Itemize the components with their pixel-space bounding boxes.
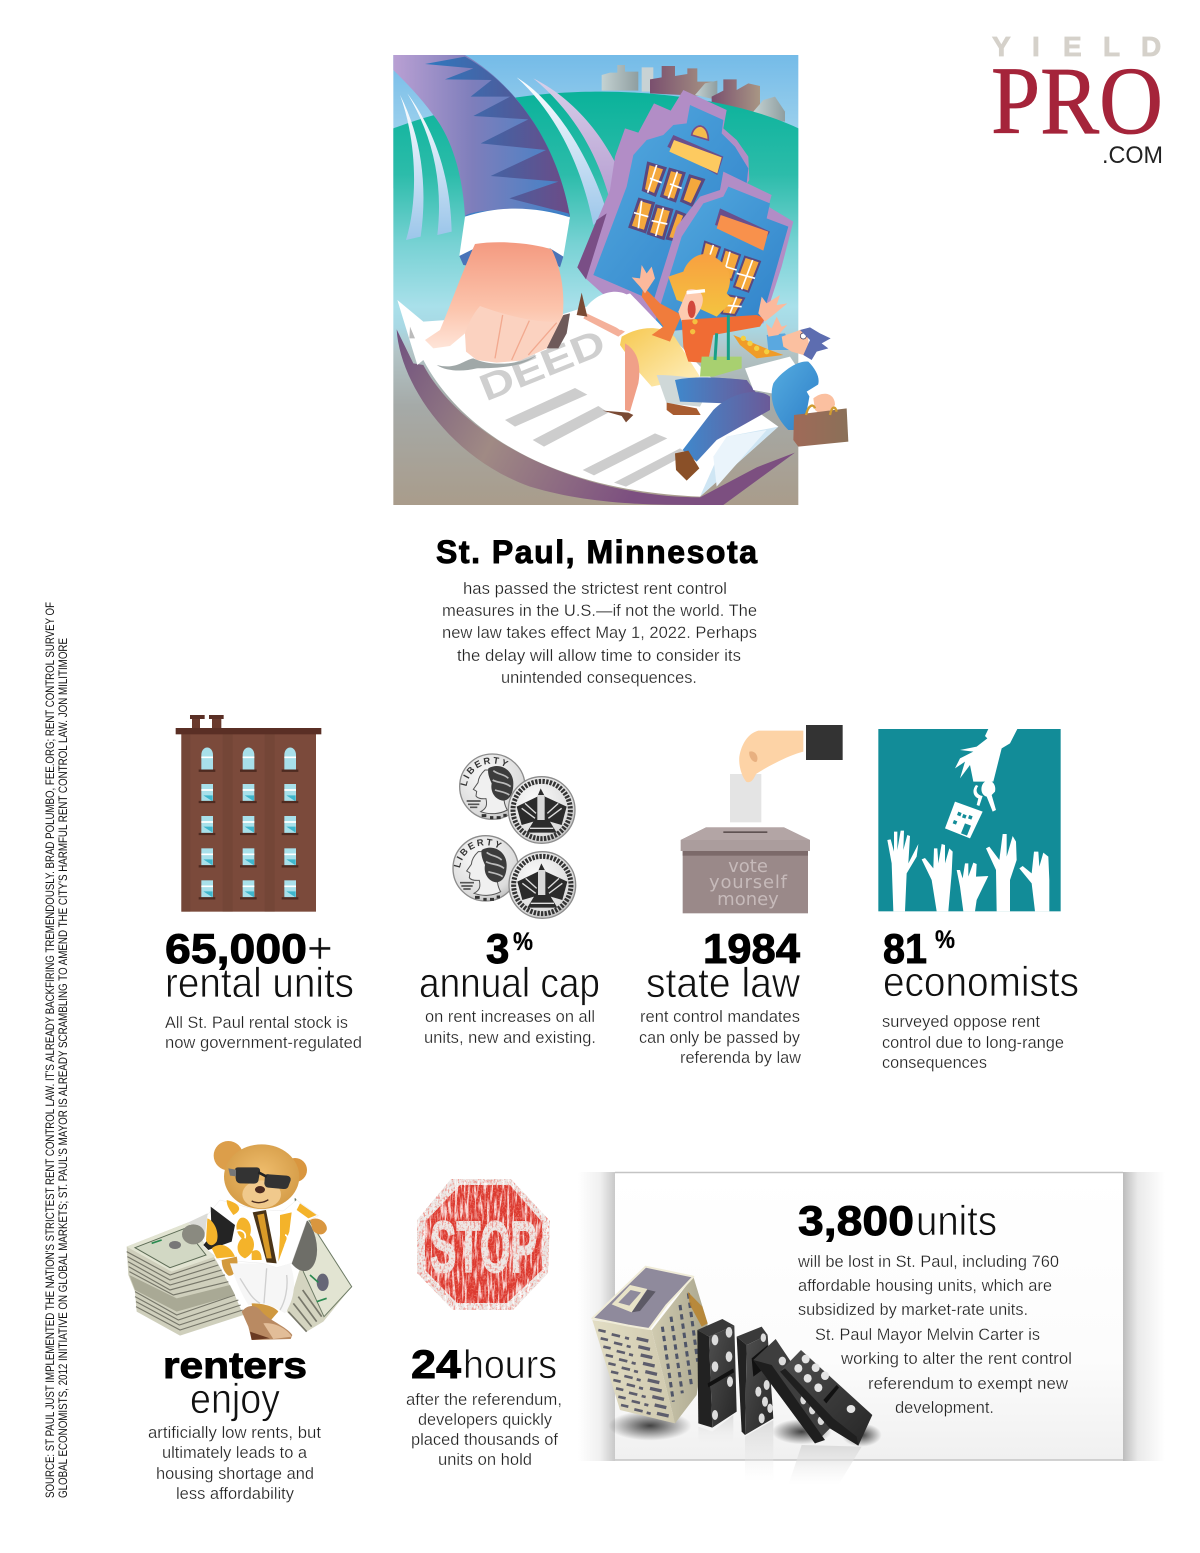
description: units on hold — [438, 1450, 532, 1469]
logo word: yield: L — [1103, 31, 1120, 62]
shirt — [203, 1200, 318, 1268]
icon: ballot box with hand — [681, 725, 843, 913]
stat: renters enjoy — [127, 1141, 352, 1503]
quarter heads 2 — [452, 835, 518, 902]
intro paragraph: the delay will allow time to consider its — [457, 646, 741, 665]
man falling with briefcase — [657, 317, 848, 481]
intro paragraph: unintended consequences. — [501, 668, 697, 687]
description: surveyed oppose rent — [882, 1012, 1040, 1031]
source note: GLOBAL ECONOMISTS, 2012 INITIATIVE ON GLOBAL MARKETS; ST. PAUL'S MAYOR IS ALREADY SCRAMBLING TO AMEND THE CITY'S HARMFUL RENT CONTROL LAW. JON MILITIMORE — [58, 638, 70, 1498]
logo: Yield Pro — [991, 31, 1163, 169]
description — [639, 1007, 802, 1067]
shadows and reflections — [608, 1411, 882, 1485]
description: will be lost in St. Paul, including 760 — [797, 1252, 1059, 1271]
description: ultimately leads to a — [162, 1443, 308, 1462]
domino 2 — [737, 1327, 773, 1435]
logo word: yield: E — [1063, 31, 1082, 62]
description: units, new and existing. — [424, 1028, 596, 1047]
description: now government-regulated — [165, 1033, 362, 1052]
description: rent control mandates — [640, 1007, 800, 1026]
description: referenda by law — [680, 1048, 802, 1067]
deed wording and lines — [473, 321, 688, 487]
label: annual cap: annual cap — [419, 959, 600, 1006]
distant skyline — [602, 65, 785, 122]
icon: quarters — [452, 753, 576, 919]
description — [165, 1013, 362, 1052]
description: artificially low rents, but — [148, 1423, 321, 1442]
description — [148, 1423, 321, 1503]
panel: 3,800 units lost — [578, 1172, 1165, 1485]
stat: 24 hours — [406, 1178, 562, 1469]
quarter heads 2: LIBERTY — [454, 838, 502, 868]
icon: teddy bear on stack of money — [127, 1141, 352, 1340]
heading: renters: renters — [163, 1345, 307, 1386]
description: subsidized by market-rate units. — [798, 1300, 1028, 1319]
title: St. Paul, Minnesota — [436, 534, 757, 570]
description: working to alter the rent control — [840, 1349, 1072, 1368]
quarter heads 1 — [459, 753, 525, 820]
front building — [643, 172, 793, 333]
percent sign: % — [513, 928, 533, 956]
description — [406, 1390, 562, 1469]
description: after the referendum, — [406, 1390, 562, 1409]
figure: 3,800 units: units — [916, 1197, 997, 1244]
domino 4 — [780, 1350, 872, 1446]
money stack — [127, 1198, 352, 1336]
quarter tails 1 — [508, 777, 575, 843]
woman falling — [577, 254, 787, 422]
logo word: .com: .COM — [1102, 142, 1163, 169]
description: referendum to exempt new — [868, 1374, 1069, 1393]
panel background — [578, 1172, 1165, 1461]
suit sleeve — [393, 55, 570, 222]
description — [424, 1007, 596, 1047]
ballot box text — [709, 856, 788, 910]
label: enjoy: enjoy — [190, 1375, 280, 1422]
ballot box text: vote — [728, 856, 768, 877]
stat: 81% economists — [878, 729, 1079, 1072]
illustration: hand crushing deed with buildings and people — [393, 55, 848, 505]
icon: distressed stop sign: STOP — [430, 1208, 537, 1288]
deed paper — [397, 293, 778, 497]
motion lines — [400, 77, 632, 240]
label: economists: economists — [883, 958, 1079, 1005]
stat: 3% annual cap — [419, 753, 600, 1047]
domino 1 — [697, 1319, 737, 1428]
description: development. — [895, 1398, 994, 1417]
icon: distressed stop sign — [417, 1178, 551, 1312]
description: affordable housing units, which are — [798, 1276, 1052, 1295]
figure: 3: 3 — [486, 925, 509, 972]
description: can only be passed by — [639, 1028, 800, 1047]
label: rental units: rental units — [165, 959, 354, 1006]
green hill and lower background — [393, 92, 798, 505]
description — [797, 1252, 1072, 1417]
figure: 3,800 units — [798, 1197, 997, 1244]
quarter heads 1: LIBERTY — [460, 756, 508, 786]
giant hand and cuff — [425, 209, 570, 371]
source note: SOURCE: ST PAUL JUST IMPLEMENTED THE NATION'S STRICTEST RENT CONTROL LAW. IT'S ALREADY BACKFIRING TREMENDOUSLY. BRAD POLUMBO, FEE.ORG; RENT CONTROL SURVEY OF — [45, 602, 57, 1498]
tower — [592, 1267, 708, 1423]
percent sign: % — [935, 926, 955, 954]
intro paragraph: measures in the U.S.—if not the world. The — [442, 601, 757, 620]
intro paragraph: new law takes effect May 1, 2022. Perhaps — [442, 623, 757, 642]
icon: hands reaching for house keys — [878, 729, 1061, 911]
ballot box text: yourself — [709, 872, 788, 893]
logo word: yield: I — [1032, 31, 1040, 62]
figure: 65,000+: + — [307, 924, 333, 973]
description: All St. Paul rental stock is — [165, 1013, 348, 1032]
ballot box text: money — [717, 889, 779, 910]
figure: 24 hours: hours — [463, 1343, 557, 1387]
intro paragraph: has passed the strictest rent control — [463, 579, 727, 598]
description: consequences — [882, 1053, 987, 1072]
bear — [203, 1141, 327, 1340]
quarter tails 2 — [509, 852, 576, 918]
figure: 3,800 units: 3,800 — [798, 1197, 914, 1244]
figure: 24 hours — [411, 1343, 557, 1387]
logo word: pro: PRO — [991, 47, 1163, 154]
description: housing shortage and — [156, 1464, 314, 1483]
figure: 1984: 1984 — [703, 925, 801, 972]
illustration: building and falling dominoes — [592, 1267, 882, 1485]
logo word: yield: D — [1141, 31, 1161, 62]
intro paragraph — [442, 579, 757, 687]
deed wording and lines: DEED — [473, 321, 611, 409]
domino 3 — [753, 1339, 833, 1443]
figure: 24 hours: 24 — [411, 1343, 462, 1387]
description: developers quickly — [418, 1410, 552, 1429]
description: placed thousands of — [411, 1430, 558, 1449]
logo word: yield: Y — [992, 31, 1011, 62]
description — [882, 1012, 1064, 1072]
figure: 65,000+: 65,000 — [165, 925, 307, 972]
sky — [393, 55, 798, 188]
source note — [45, 602, 70, 1498]
description: control due to long-range — [882, 1033, 1064, 1052]
figure: 81: 81 — [883, 925, 927, 972]
stat: 1984 state law — [639, 725, 843, 1067]
description: St. Paul Mayor Melvin Carter is — [815, 1325, 1040, 1344]
purple paper shadow — [397, 329, 795, 505]
description: less affordability — [176, 1484, 294, 1503]
description: on rent increases on all — [425, 1007, 595, 1026]
icon: apartment building — [176, 715, 321, 912]
back building — [577, 90, 749, 333]
label: state law: state law — [646, 959, 801, 1006]
stat: 65,000+ rental units — [165, 715, 362, 1052]
